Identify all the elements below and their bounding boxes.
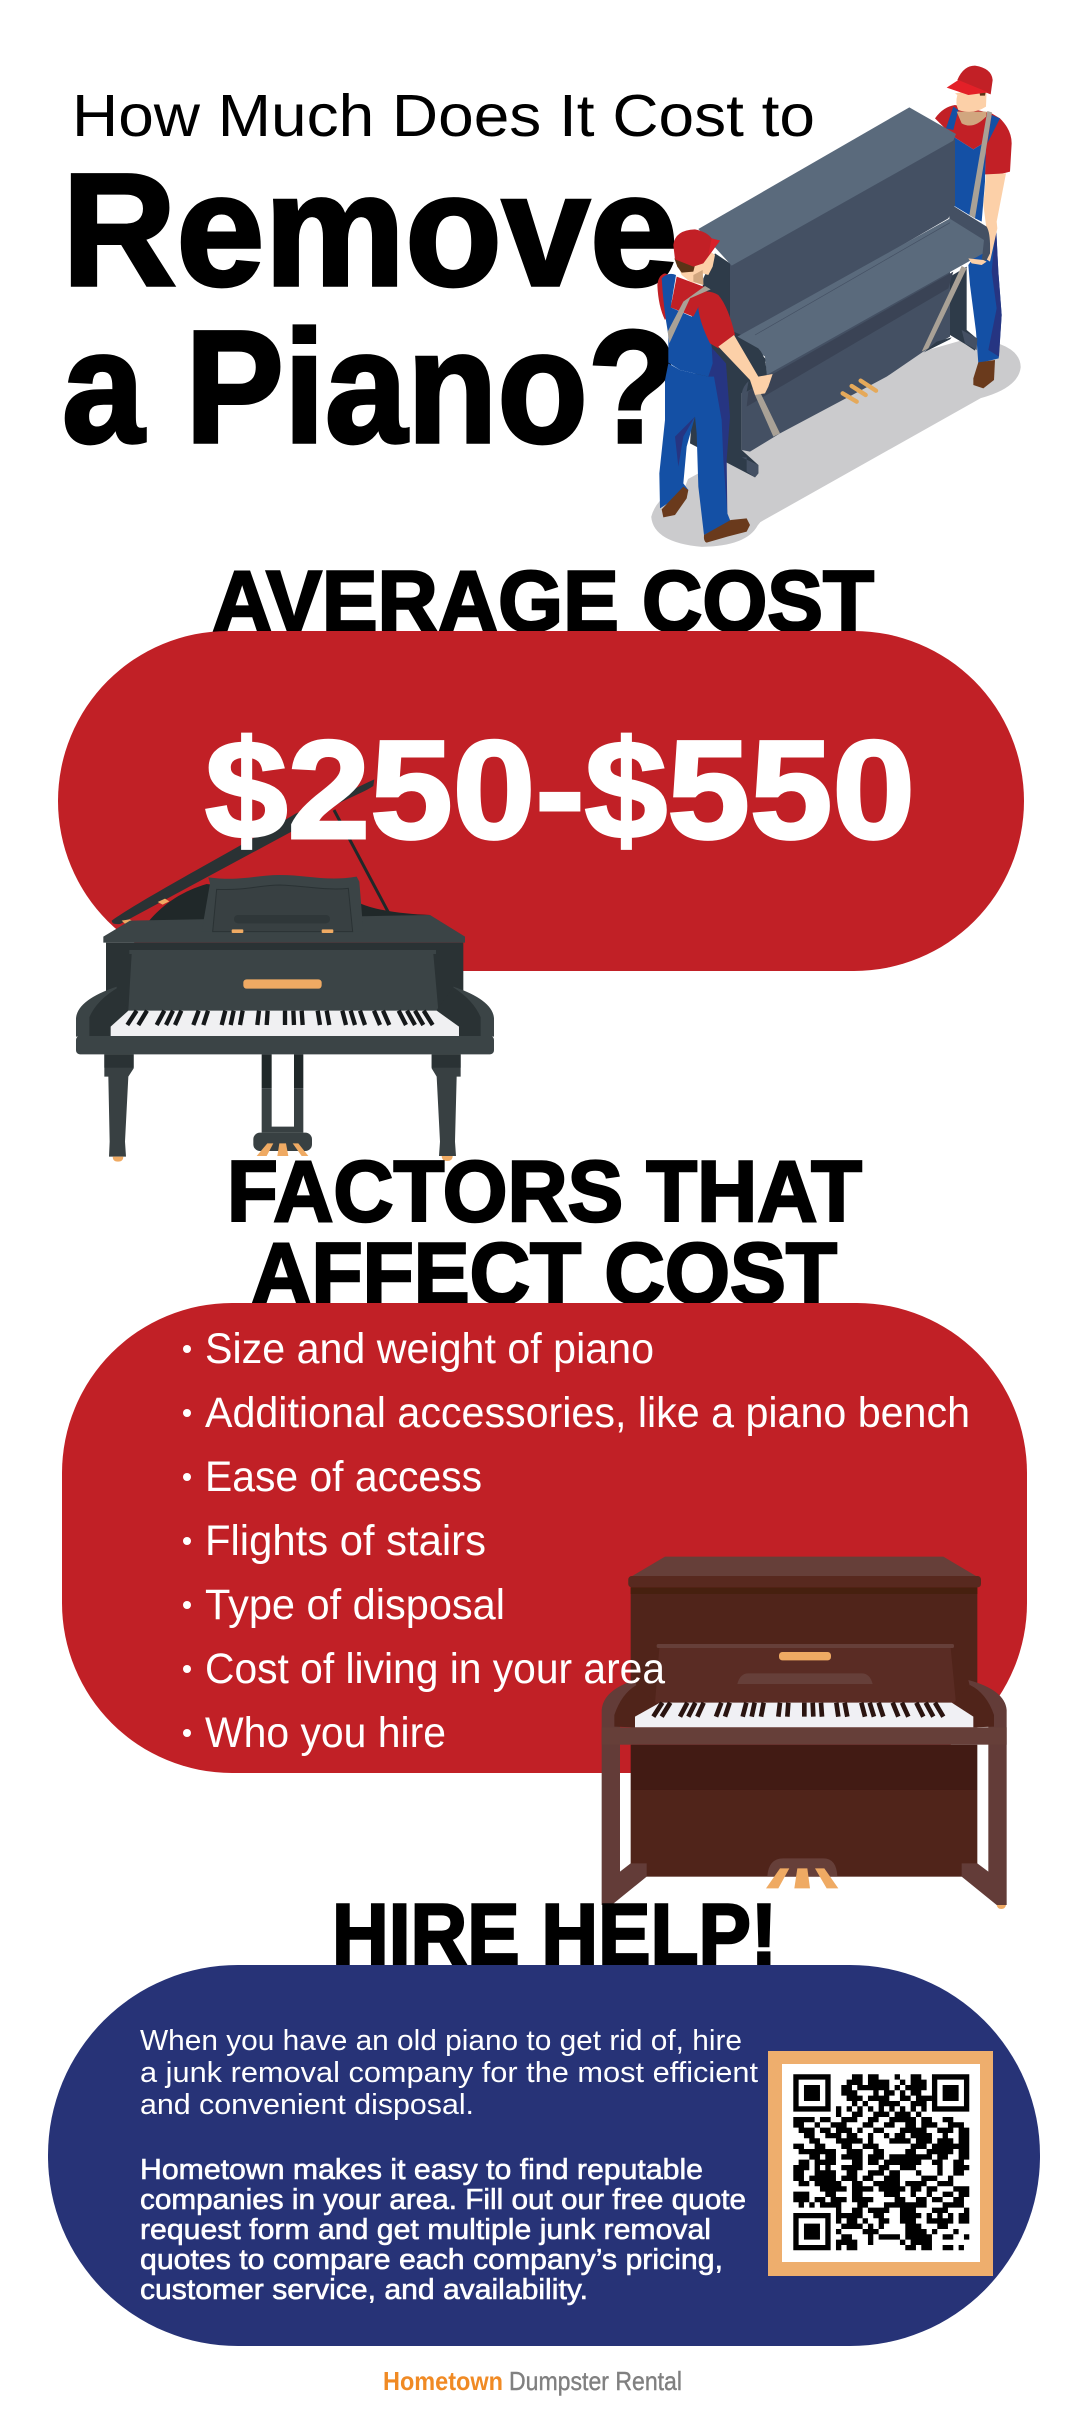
left mover [657,229,773,543]
illustration: grand piano [76,779,494,1162]
paragraph: hometown: companies in your area. Fill out our free quote [140,2184,746,2216]
footer logo [383,2366,682,2396]
pedals [767,1858,837,1877]
legs [104,1054,134,1157]
paragraph: hometown: request form and get multiple junk removal [140,2214,711,2246]
paragraph: hometown [140,2154,746,2306]
footer logo: Dumpster Rental [509,2366,682,2396]
lid hinges [122,899,169,926]
lid [112,779,374,924]
heading: factors line 2: AFFECT COST [251,1226,837,1322]
illustration: movers carrying upright piano [651,66,1021,547]
factors list: Who you hire [205,1709,446,1757]
heading: factors line 1: FACTORS THAT [227,1144,862,1240]
body [631,1587,977,1727]
factors list: Ease of access [205,1453,482,1501]
factors list [183,1325,970,1757]
floor shadow [651,338,1021,547]
paragraph: intro: When you have an old piano to get rid of, hire [140,2025,742,2057]
paragraph: hometown: quotes to compare each company’s pricing, [140,2244,723,2276]
piano arms [76,987,494,1037]
price text: $250-$550 [205,711,915,868]
paragraph: hometown: customer service, and availability. [140,2274,588,2306]
paragraph: intro: and convenient disposal. [140,2089,474,2121]
arms and legs [602,1680,647,1905]
factors list: Additional accessories, like a piano bench [205,1389,970,1437]
factors list: Cost of living in your area [205,1645,665,1693]
key slip [602,1727,1007,1745]
lower body [631,1745,977,1790]
paragraph: intro [140,2025,758,2121]
heading: average cost: AVERAGE COST [212,554,874,650]
title: Remove: Remove [62,140,678,319]
right mover [935,66,1012,388]
factors list: Size and weight of piano [205,1325,654,1373]
keyboard [635,1703,973,1727]
key slip [76,1036,494,1054]
case body [106,943,463,1014]
panel: hire help pill [48,1965,1040,2346]
title: a Piano?: a Piano? [62,297,678,476]
top [628,1557,980,1585]
illustration: upright piano [602,1557,1007,1909]
case top [103,915,465,943]
QR code in orange frame [768,2051,993,2276]
rear body [148,884,433,923]
upright piano [690,107,990,477]
pedal lyre [262,1088,303,1133]
title: small line: How Much Does It Cost to [72,83,815,149]
panel: average cost pill [58,631,1024,971]
footer logo: Hometown [383,2366,503,2396]
keyboard [111,1011,459,1036]
paragraph: intro: a junk removal company for the most efficient [140,2057,758,2089]
heading: hire help: HIRE HELP! [332,1887,777,1983]
lid prop [334,810,391,917]
paragraph: hometown: Hometown makes it easy to find reputable [140,2154,703,2186]
factors list: Type of disposal [205,1581,505,1629]
music desk [202,875,363,932]
fall board [657,1644,954,1648]
panel: factors pill [62,1303,1027,1773]
factors list: Flights of stairs [205,1517,486,1565]
